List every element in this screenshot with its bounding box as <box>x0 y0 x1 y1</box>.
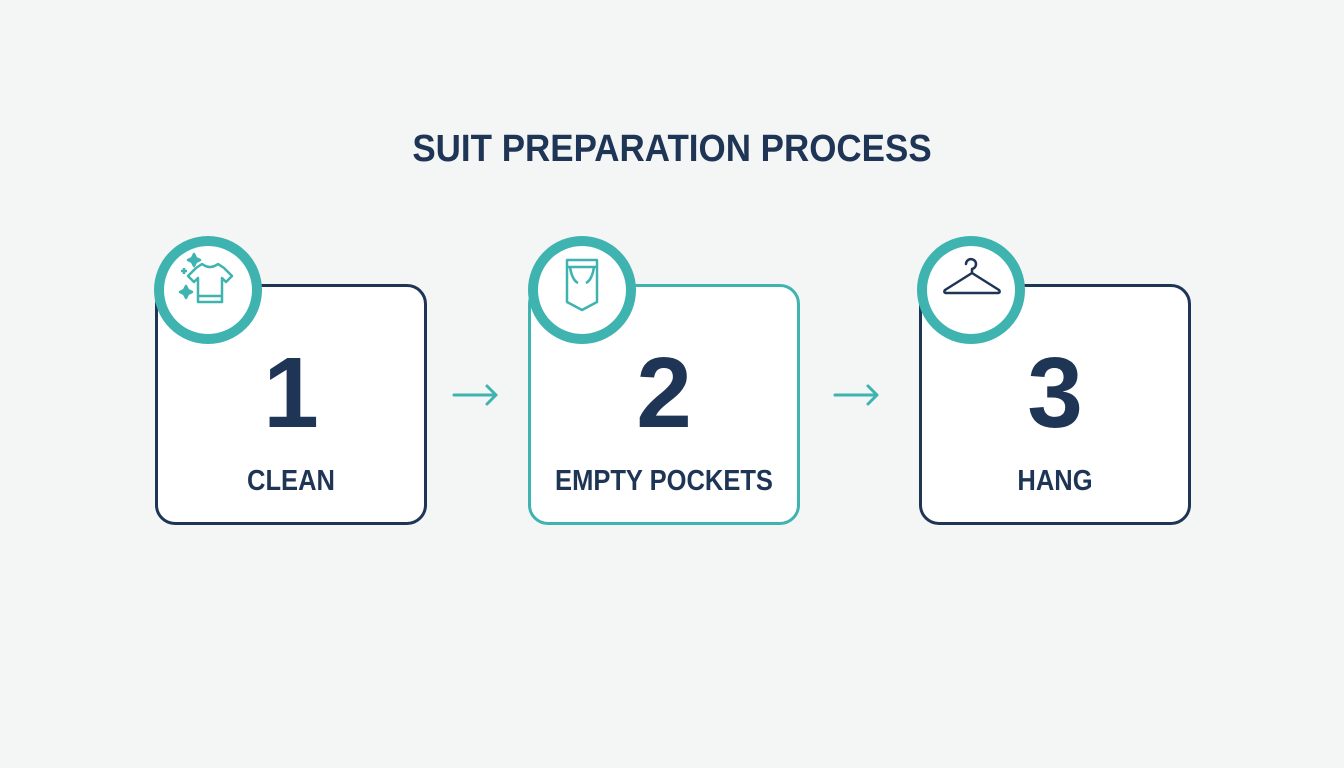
label hang: HANG <box>1017 465 1093 497</box>
label empty pockets: EMPTY POCKETS <box>555 465 773 497</box>
title: SUIT PREPARATION PROCESS <box>412 128 932 170</box>
number 3: 3 <box>1027 337 1083 449</box>
number 1: 1 <box>263 337 319 449</box>
number 2: 2 <box>636 337 692 449</box>
icon: shirt with sparkles <box>154 236 262 344</box>
card 1: clean <box>155 284 427 525</box>
arrow 1 <box>452 384 498 406</box>
icon: pocket <box>528 236 636 344</box>
card 2: empty pockets <box>528 284 800 525</box>
label clean: CLEAN <box>247 465 335 497</box>
card 3: hang <box>919 284 1191 525</box>
icon: hanger <box>917 236 1025 344</box>
arrow 2 <box>834 384 879 406</box>
